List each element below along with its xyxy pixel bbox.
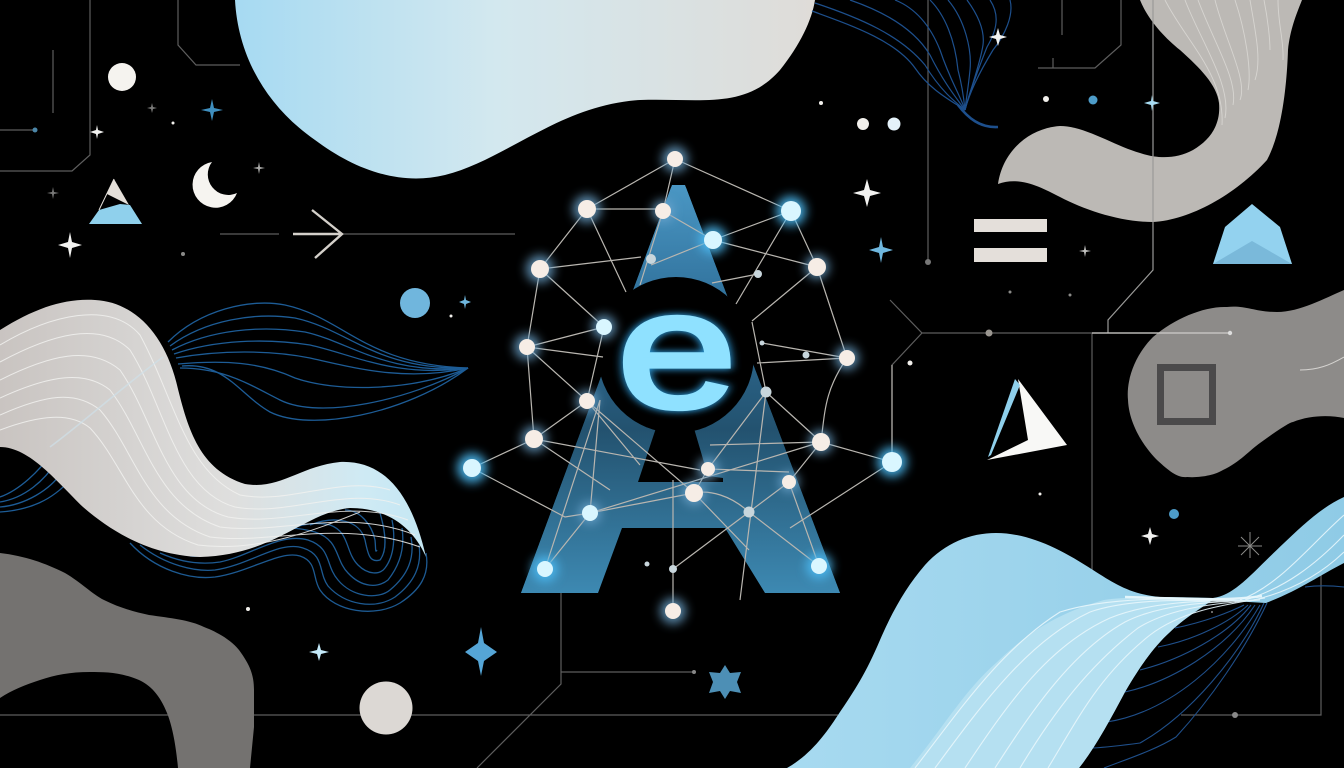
wave lines: dark blue upper left <box>0 303 468 512</box>
icon: white dot <box>108 63 136 91</box>
icon: blue pentagon roof <box>1213 204 1292 264</box>
icon: blue gear star <box>709 665 741 699</box>
circuit line: over right blob <box>1092 331 1344 370</box>
icon: white moon <box>193 162 237 208</box>
icon: arrow <box>293 210 342 258</box>
icon: equals bars <box>974 219 1047 262</box>
emblem: glowing letter e: e <box>617 257 737 442</box>
blob: lower left grey <box>0 553 254 768</box>
icon: blue circle <box>400 288 430 318</box>
ribbon: lower right light blue <box>787 497 1344 768</box>
wave lines: dark blue under ribbon <box>130 510 427 611</box>
small dots <box>172 96 1213 613</box>
wave lines: top right fan <box>812 0 1011 127</box>
icon: cream circle <box>360 682 412 734</box>
emblem: glowing letter e: e <box>617 257 737 442</box>
blob: top centre <box>235 0 815 178</box>
ribbon: left wave <box>0 300 426 557</box>
network nodes <box>463 151 902 619</box>
icon: blue burst star <box>465 627 497 676</box>
circuit line: over top right wave <box>1108 0 1153 333</box>
network edges <box>472 159 892 611</box>
icon: square outline <box>1160 368 1212 422</box>
emblem: letter A: A <box>467 60 893 719</box>
emblem: keyhole cut-out <box>598 277 754 482</box>
sparkles <box>47 28 1262 661</box>
blob: right grey <box>1128 290 1344 477</box>
blob: top right wave <box>998 0 1302 222</box>
icon: paper plane triangle <box>987 379 1067 460</box>
network nodes: glow <box>457 146 907 624</box>
icon: mountain triangle <box>89 179 142 224</box>
